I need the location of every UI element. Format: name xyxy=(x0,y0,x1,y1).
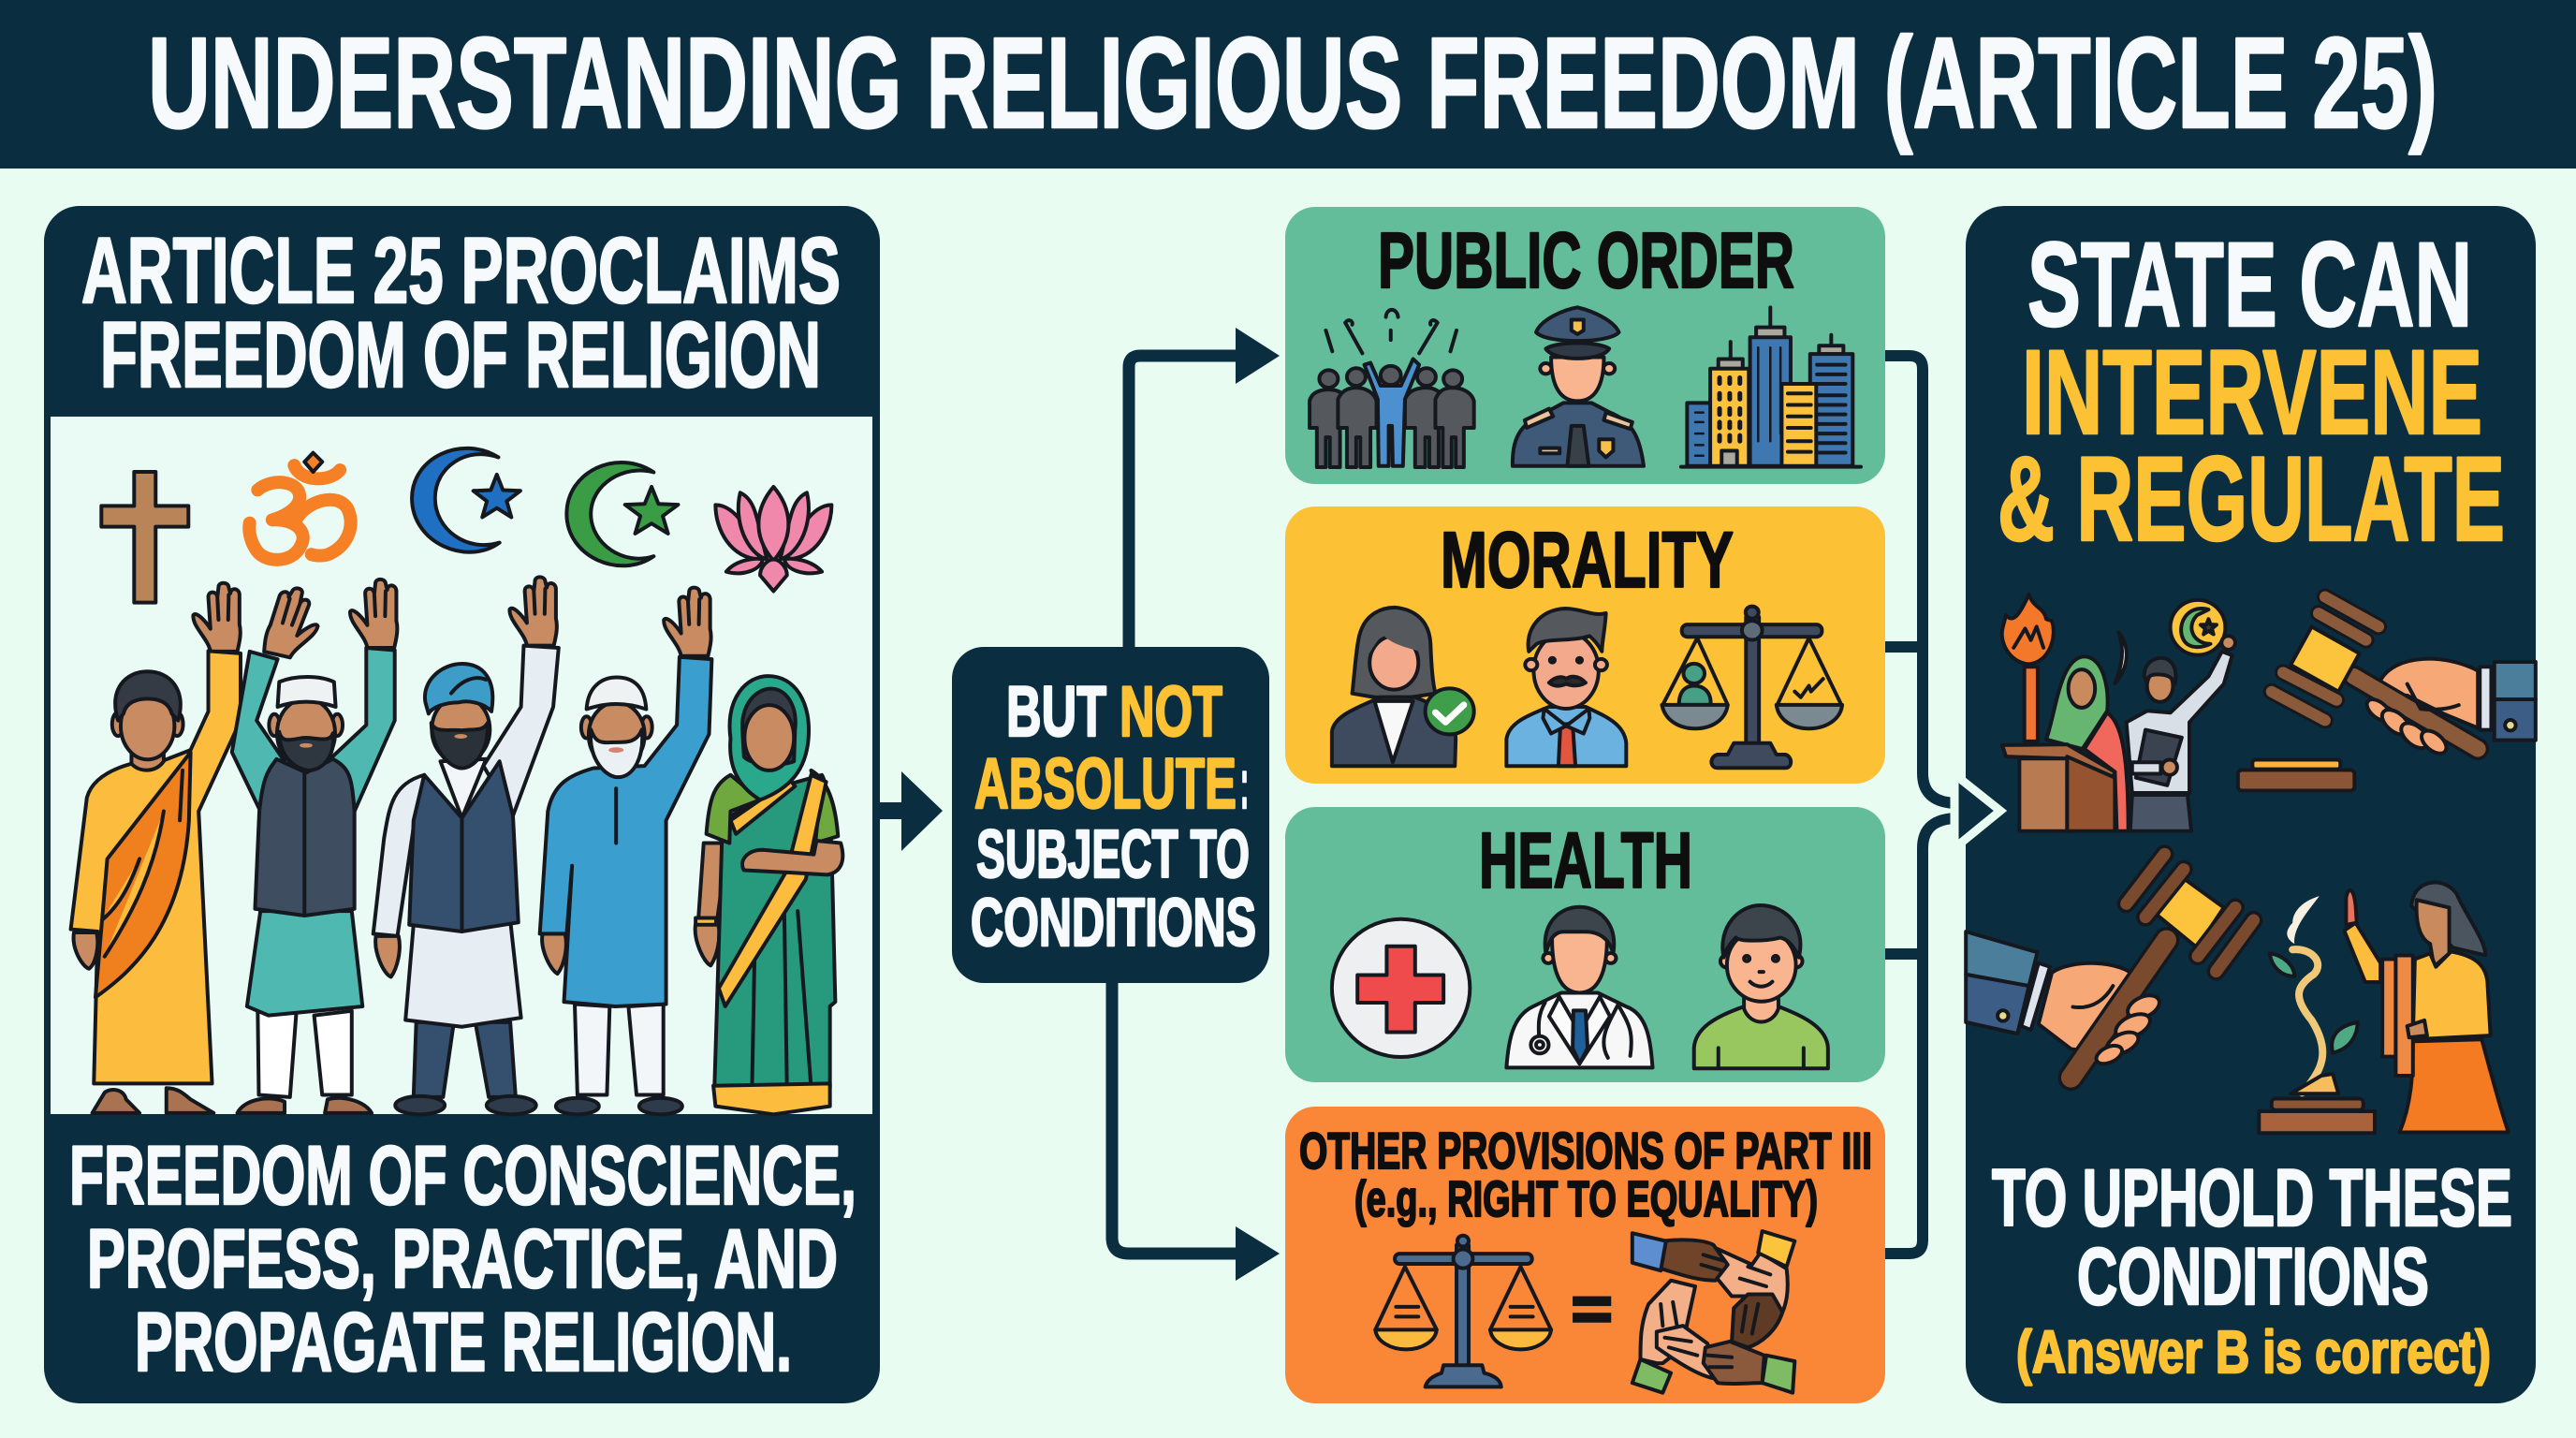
caption: to uphold these conditions: CONDITIONS xyxy=(2077,1232,2429,1322)
icons: woman, man, scales xyxy=(1332,607,1842,768)
icon: balanced scales xyxy=(1375,1236,1551,1387)
heading: article 25 proclaims: ARTICLE 25 PROCLAIMS xyxy=(81,218,841,322)
heading: state can intervene and regulate xyxy=(1998,218,2505,566)
icon: speaker at podium with torch xyxy=(2002,594,2235,831)
person: sikh man with turban xyxy=(373,577,559,1114)
callout: but not absolute: : xyxy=(1240,744,1249,824)
illustrations: protest, gavels, plant xyxy=(1966,594,2576,1133)
icon: crowd xyxy=(1310,310,1474,467)
icon: lotus xyxy=(715,487,831,591)
person: teal kurta and vest xyxy=(232,580,397,1113)
heading: other provisions of part iii: (e.g., RIGHT TO EQUALITY) xyxy=(1354,1171,1818,1227)
caption: freedom of conscience: PROFESS, PRACTICE, AND xyxy=(87,1211,838,1305)
bracket connector: conditions to state panel xyxy=(1881,356,1958,1254)
religious symbols and people illustration xyxy=(71,448,842,1114)
person: orange drape xyxy=(71,583,241,1113)
heading: article 25 proclaims: FREEDOM OF RELIGION xyxy=(100,302,821,406)
callout: but not absolute xyxy=(952,647,1269,983)
callout: but not absolute: CONDITIONS xyxy=(971,886,1256,961)
icons: crowd, police officer, city xyxy=(1310,307,1861,467)
icon: scales of justice xyxy=(1661,607,1842,768)
panel: morality xyxy=(1285,506,1885,784)
caption: freedom of conscience: PROPAGATE RELIGION. xyxy=(135,1295,792,1388)
caption: to uphold these conditions xyxy=(1992,1153,2512,1386)
icon: green crescent and star xyxy=(566,462,678,565)
icon: cross xyxy=(101,472,188,603)
icon: city skyline xyxy=(1681,307,1861,467)
caption: freedom of conscience xyxy=(69,1128,856,1388)
icon: medical cross xyxy=(1332,919,1470,1057)
arrow: chevron into state panel xyxy=(1954,774,2000,848)
arrow: conditions box to other provisions xyxy=(1112,979,1280,1281)
illustration panel background xyxy=(51,417,872,1114)
heading: health: HEALTH xyxy=(1479,816,1692,904)
icon: police officer xyxy=(1513,307,1644,466)
panel: state can intervene xyxy=(1966,206,2576,1403)
icon: patient xyxy=(1694,905,1828,1068)
person: blue kurta xyxy=(540,588,711,1114)
icon: woman with check xyxy=(1332,608,1474,766)
heading: article 25 proclaims xyxy=(81,218,841,406)
panel: other provisions xyxy=(1285,1107,1885,1403)
icon: equals sign xyxy=(1573,1297,1611,1323)
icon: gavel and hand top xyxy=(2238,597,2536,791)
callout: but not absolute: ABSOLUTE xyxy=(974,744,1237,824)
person: woman in green sari xyxy=(695,676,842,1114)
callout: but not absolute: NOT xyxy=(1120,672,1222,752)
icon: om xyxy=(249,453,351,560)
caption: freedom of conscience: FREEDOM OF CONSCIENCE, xyxy=(69,1128,856,1222)
heading: other provisions of part iii: OTHER PROVISIONS OF PART III xyxy=(1299,1122,1872,1180)
panel: public order xyxy=(1285,207,1885,484)
panel: health xyxy=(1285,807,1885,1082)
icons: scales equals joined hands xyxy=(1375,1231,1794,1393)
icon: plant sprout and woman xyxy=(2259,883,2509,1133)
panel: article 25 xyxy=(44,206,880,1403)
heading: other provisions of part iii xyxy=(1299,1122,1872,1227)
icon: blue crescent and star xyxy=(412,448,520,552)
arrow: conditions box to public order xyxy=(1129,328,1280,651)
icons: medical cross, doctor, patient xyxy=(1332,905,1828,1068)
heading: public order: PUBLIC ORDER xyxy=(1378,216,1794,304)
icon: doctor xyxy=(1506,907,1653,1067)
callout: but not absolute: SUBJECT TO xyxy=(976,817,1250,892)
arrow: article panel to conditions box xyxy=(876,771,943,851)
icon: joined hands xyxy=(1632,1231,1794,1393)
callout: but not absolute: BUT xyxy=(1006,672,1106,752)
heading: morality: MORALITY xyxy=(1441,516,1734,604)
icon: man with moustache xyxy=(1506,609,1626,766)
icon: gavel and hand bottom xyxy=(1966,854,2254,1078)
